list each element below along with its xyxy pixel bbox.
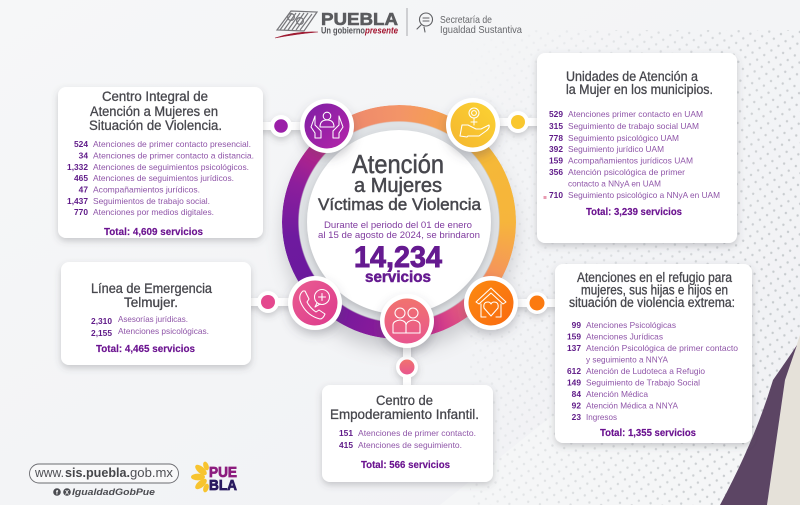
social handle: f [56, 490, 59, 496]
heading: Empoderamiento Infantil. [330, 407, 479, 422]
service list: Atenciones de seguimiento. [358, 440, 462, 450]
service list: 137 [567, 343, 581, 353]
service list: 778 [549, 133, 563, 143]
service list: 415 [339, 440, 353, 450]
panel: Centro de Empoderamiento [322, 385, 493, 482]
period description [318, 220, 480, 241]
service list: 356 [549, 167, 563, 177]
heading: Telmujer. [124, 295, 178, 310]
icon: phone with medical bubble [288, 276, 342, 330]
service list: Atenciones psicológicas. [118, 326, 209, 336]
service list: 529 [549, 109, 563, 119]
heading [89, 89, 222, 133]
service list: Seguimiento de trabajo social UAM [568, 121, 699, 131]
period description: Durante el periodo del 01 de enero [324, 220, 472, 231]
website pill: sis.puebla. [65, 466, 130, 480]
social handle: IgualdadGobPue [72, 487, 155, 497]
total: Total: 1,355 servicios [600, 428, 696, 439]
panel: Línea de Emergencia [61, 262, 251, 365]
central ring [282, 105, 516, 339]
service list: Atención psicológica de primer [568, 167, 685, 177]
service list [67, 139, 254, 217]
connector dots [261, 115, 544, 374]
total: Total: 4,465 servicios [96, 344, 195, 355]
icon: hands caring for person [300, 99, 354, 153]
service list: Atenciones de seguimientos psicológicos. [93, 162, 249, 172]
footer website and social [30, 464, 178, 497]
service list: 47 [79, 184, 88, 194]
heading: mujeres, sus hijas e hijos en [581, 282, 728, 298]
service list: Seguimiento de Trabajo Social [586, 378, 700, 388]
heading: Línea de Emergencia [91, 281, 213, 296]
service list: Asesorías jurídicas. [118, 314, 188, 324]
website pill: www. [34, 466, 64, 480]
logo: Puebla: PUEBLA [321, 9, 398, 29]
service list: Atenciones Psicológicas [586, 320, 676, 330]
period description: al 15 de agosto de 2024, se brindaron [318, 230, 480, 241]
service list: Atenciones de primer contacto a distancia. [93, 150, 254, 160]
icon: two children [380, 294, 434, 348]
service list: Atención de Ludoteca a Refugio [586, 366, 705, 376]
panel: Refugio [555, 264, 752, 443]
logo: Puebla: presente [364, 26, 398, 36]
service list: 2,155 [91, 328, 112, 338]
service list: 149 [567, 378, 581, 388]
heading [91, 281, 213, 310]
service list: 151 [339, 428, 353, 438]
logo: Secretaría: Igualdad Sustantiva [440, 24, 522, 36]
service list: Atenciones de primer contacto. [358, 428, 476, 438]
service list: contacto a NNyA en UAM [568, 178, 661, 188]
total: Total: 566 servicios [361, 460, 450, 471]
total services: 14,234 [354, 241, 442, 274]
service list: Atenciones por medios digitales. [93, 207, 214, 217]
header logos [275, 8, 522, 38]
service list: Seguimiento psicológico a NNyA en UAM [568, 190, 720, 200]
heading: Unidades de Atención a [566, 69, 699, 84]
central circle [299, 122, 499, 322]
social handle: X [65, 490, 69, 496]
heading [566, 69, 713, 97]
service list: Seguimientos de trabajo social. [93, 196, 210, 206]
service list: Atención Médica a NNYA [586, 400, 678, 410]
logo: Puebla brand: PUE [209, 464, 237, 481]
central title: Atención [352, 149, 444, 179]
connectors [245, 111, 560, 395]
service list: Seguimiento psicológico UAM [568, 133, 679, 143]
service list [544, 109, 720, 200]
service list: Atenciones primer contacto en UAM [568, 109, 703, 119]
service list: 710 [549, 190, 563, 200]
service list: 1,332 [67, 162, 88, 172]
service list: 315 [549, 121, 563, 131]
service list: 99 [572, 320, 581, 330]
service list: Atenciones de seguimientos jurídicos. [93, 173, 234, 183]
background [276, 30, 800, 505]
service list: 92 [572, 400, 581, 410]
total services: servicios [365, 269, 431, 286]
service list: Seguimiento jurídico UAM [568, 144, 664, 154]
service list: 2,310 [91, 316, 112, 326]
service list: Acompañamientos jurídicos UAM [568, 156, 693, 166]
service list: 392 [549, 144, 563, 154]
service list: Acompañamientos jurídicos. [93, 184, 200, 194]
total: Total: 3,239 servicios [586, 207, 682, 218]
logo: Puebla brand [191, 461, 237, 494]
service list: Ingresos [586, 412, 617, 422]
service list [91, 314, 209, 338]
heading: Situación de Violencia. [89, 118, 222, 133]
service list: Atención Médica [586, 389, 648, 399]
service list: 612 [567, 366, 581, 376]
service list: 524 [74, 139, 88, 149]
central title [318, 149, 482, 214]
service list: Atención Psicológica de primer contacto [586, 343, 738, 353]
service list: 465 [74, 173, 88, 183]
website pill: gob.mx [130, 466, 174, 480]
service list: 1,437 [67, 196, 88, 206]
heading: Atenciones en el refugio para [577, 270, 732, 285]
service list: 84 [572, 389, 581, 399]
service list: 23 [572, 412, 581, 422]
heading [569, 270, 735, 310]
heading [330, 393, 479, 422]
service list: 159 [567, 332, 581, 342]
heading: situación de violencia extrema: [569, 295, 735, 310]
logo: Secretaría: Secretaría de [440, 14, 492, 26]
service list: Atenciones Jurídicas [586, 332, 663, 342]
heading: Atención a Mujeres en [90, 104, 218, 119]
service list: 34 [79, 150, 88, 160]
heading: la Mujer en los municipios. [566, 82, 713, 97]
service list: y seguimiento a NNYA [586, 354, 668, 364]
heading: Centro de [376, 393, 433, 408]
logo: Puebla [275, 9, 398, 38]
service list: Atenciones de primer contacto presencial. [93, 139, 251, 149]
service list: 770 [74, 207, 88, 217]
central title: Víctimas de Violencia [318, 195, 482, 214]
icon: female symbol over hand [446, 98, 500, 152]
service list [339, 428, 476, 450]
icon: house with heart [464, 276, 518, 330]
central title: a Mujeres [354, 175, 442, 197]
logo: Puebla brand: BLA [209, 477, 237, 494]
panel: Unidades de Atención [537, 53, 737, 243]
service list [567, 320, 738, 422]
total: Total: 4,609 servicios [104, 227, 203, 238]
logo: Secretaría [417, 13, 522, 36]
panel: Centro Integral [58, 87, 263, 238]
service list: 159 [549, 156, 563, 166]
website pill [30, 464, 178, 483]
logo: Puebla: Un gobierno [321, 26, 365, 36]
heading: Centro Integral de [102, 89, 208, 104]
